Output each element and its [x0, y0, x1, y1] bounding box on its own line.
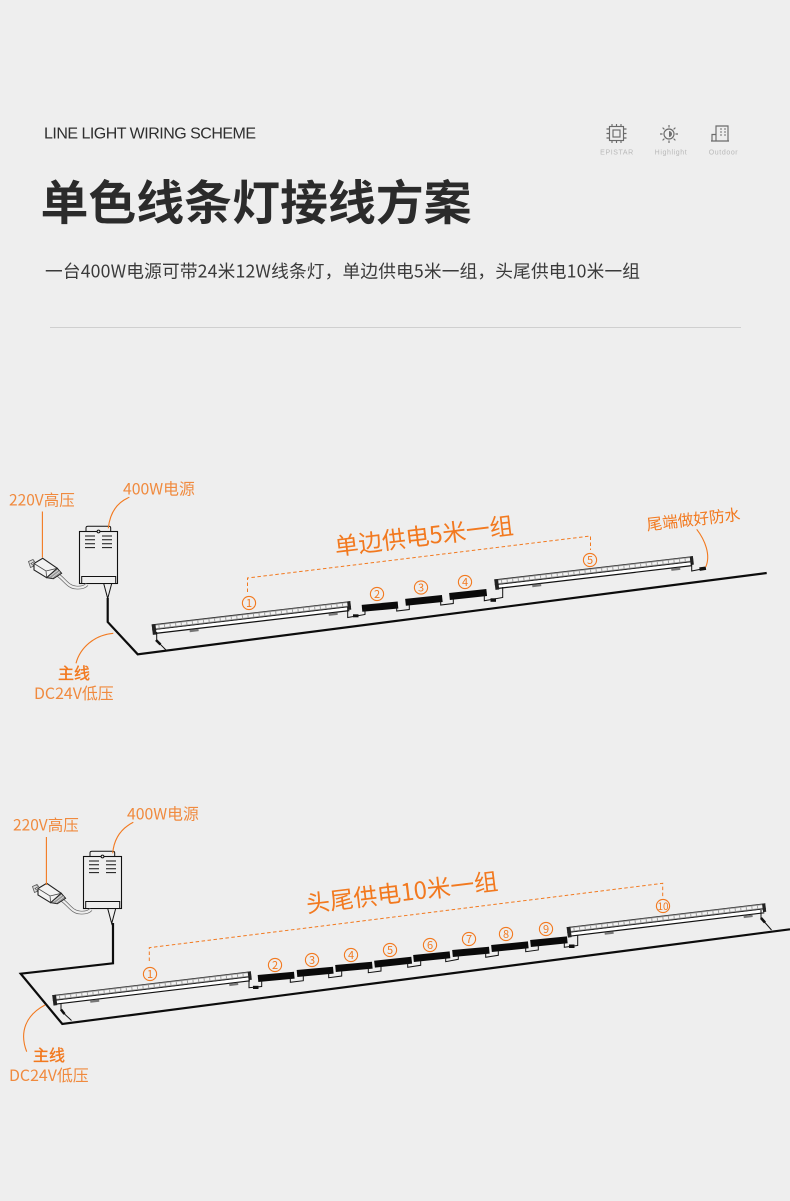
icon: Highlight sun: Highlight	[655, 150, 687, 156]
numbered markers: 5	[587, 552, 593, 568]
numbered markers: 4	[462, 574, 468, 590]
numbered markers: 6	[427, 937, 433, 953]
span label: 单边供电5米一组	[332, 506, 515, 562]
main wire	[21, 923, 790, 1024]
numbered markers: 3	[309, 952, 315, 968]
light bar 1	[52, 971, 252, 1007]
numbered markers: 10	[657, 898, 669, 913]
callout: main line	[9, 1005, 89, 1086]
callout: 400W	[108, 476, 195, 528]
power supply and plug	[28, 526, 118, 598]
numbered markers: 2	[374, 586, 380, 602]
numbered markers: 5	[387, 942, 393, 958]
callout: 400W: 400W电源	[123, 476, 195, 500]
light bar 5	[494, 556, 694, 592]
segments 2 to 9	[258, 940, 567, 978]
dashed span bracket	[248, 536, 590, 592]
callout: main line: DC24V低压	[9, 1063, 89, 1086]
callout: 220V: 220V高压	[13, 814, 79, 836]
numbered markers: 7	[466, 931, 472, 947]
light bar 10	[567, 903, 767, 939]
light bar 1	[152, 601, 352, 637]
icons row	[600, 124, 738, 156]
callout: 220V	[9, 488, 75, 558]
numbered markers: 1	[147, 966, 153, 982]
callout: 400W: 400W电源	[127, 802, 199, 824]
span label: 头尾供电10米一组	[304, 862, 500, 920]
numbered markers: 4	[348, 947, 354, 963]
callout: 220V: 220V高压	[9, 488, 75, 510]
numbered markers: 1	[246, 595, 252, 611]
numbered markers	[143, 898, 670, 982]
connectors	[61, 910, 772, 1020]
numbered markers: 9	[543, 921, 549, 937]
callout: main line: 主线	[33, 1042, 65, 1066]
diagram: head and tail feed 10m	[9, 802, 790, 1086]
power supply and plug	[32, 851, 122, 924]
icon: Outdoor building: Outdoor	[709, 150, 738, 156]
callout: tail waterproof: 尾端做好防水	[645, 502, 742, 535]
callout: 220V	[13, 814, 79, 885]
callout: main line: 主线	[58, 660, 90, 684]
description text: 一台400W电源可带24米12W线条灯，单边供电5米一组，头尾供电10米一组	[45, 258, 640, 284]
heading: English subtitle: LINE LIGHT WIRING SCHEME	[44, 126, 256, 142]
numbered markers	[242, 552, 597, 611]
diagram: single side feed 5m	[9, 476, 767, 704]
callout: main line: DC24V低压	[34, 681, 114, 704]
connectors	[156, 563, 706, 650]
dashed span bracket	[149, 883, 663, 961]
segments 2 to 4	[362, 592, 487, 608]
icon: EPISTAR chip: EPISTAR	[600, 150, 634, 156]
main wire	[108, 573, 767, 654]
callout: 400W	[113, 802, 199, 853]
callout: tail waterproof	[645, 502, 742, 567]
title: 单色线条灯接线方案	[40, 164, 472, 234]
numbered markers: 2	[272, 957, 278, 973]
callout: main line	[34, 633, 114, 704]
numbered markers: 3	[418, 580, 424, 596]
numbered markers: 8	[503, 926, 509, 942]
